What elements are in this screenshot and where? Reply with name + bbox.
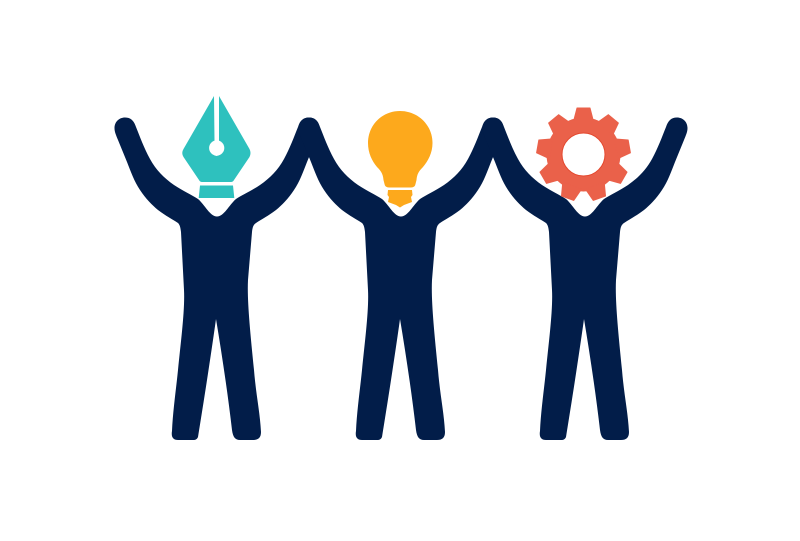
icon: light bulb — [368, 111, 432, 208]
figure: right person — [482, 118, 688, 440]
icon: gear — [536, 108, 631, 202]
figure: middle person — [298, 118, 504, 440]
icon: fountain pen nib — [182, 94, 250, 198]
figure: left person — [114, 118, 320, 440]
